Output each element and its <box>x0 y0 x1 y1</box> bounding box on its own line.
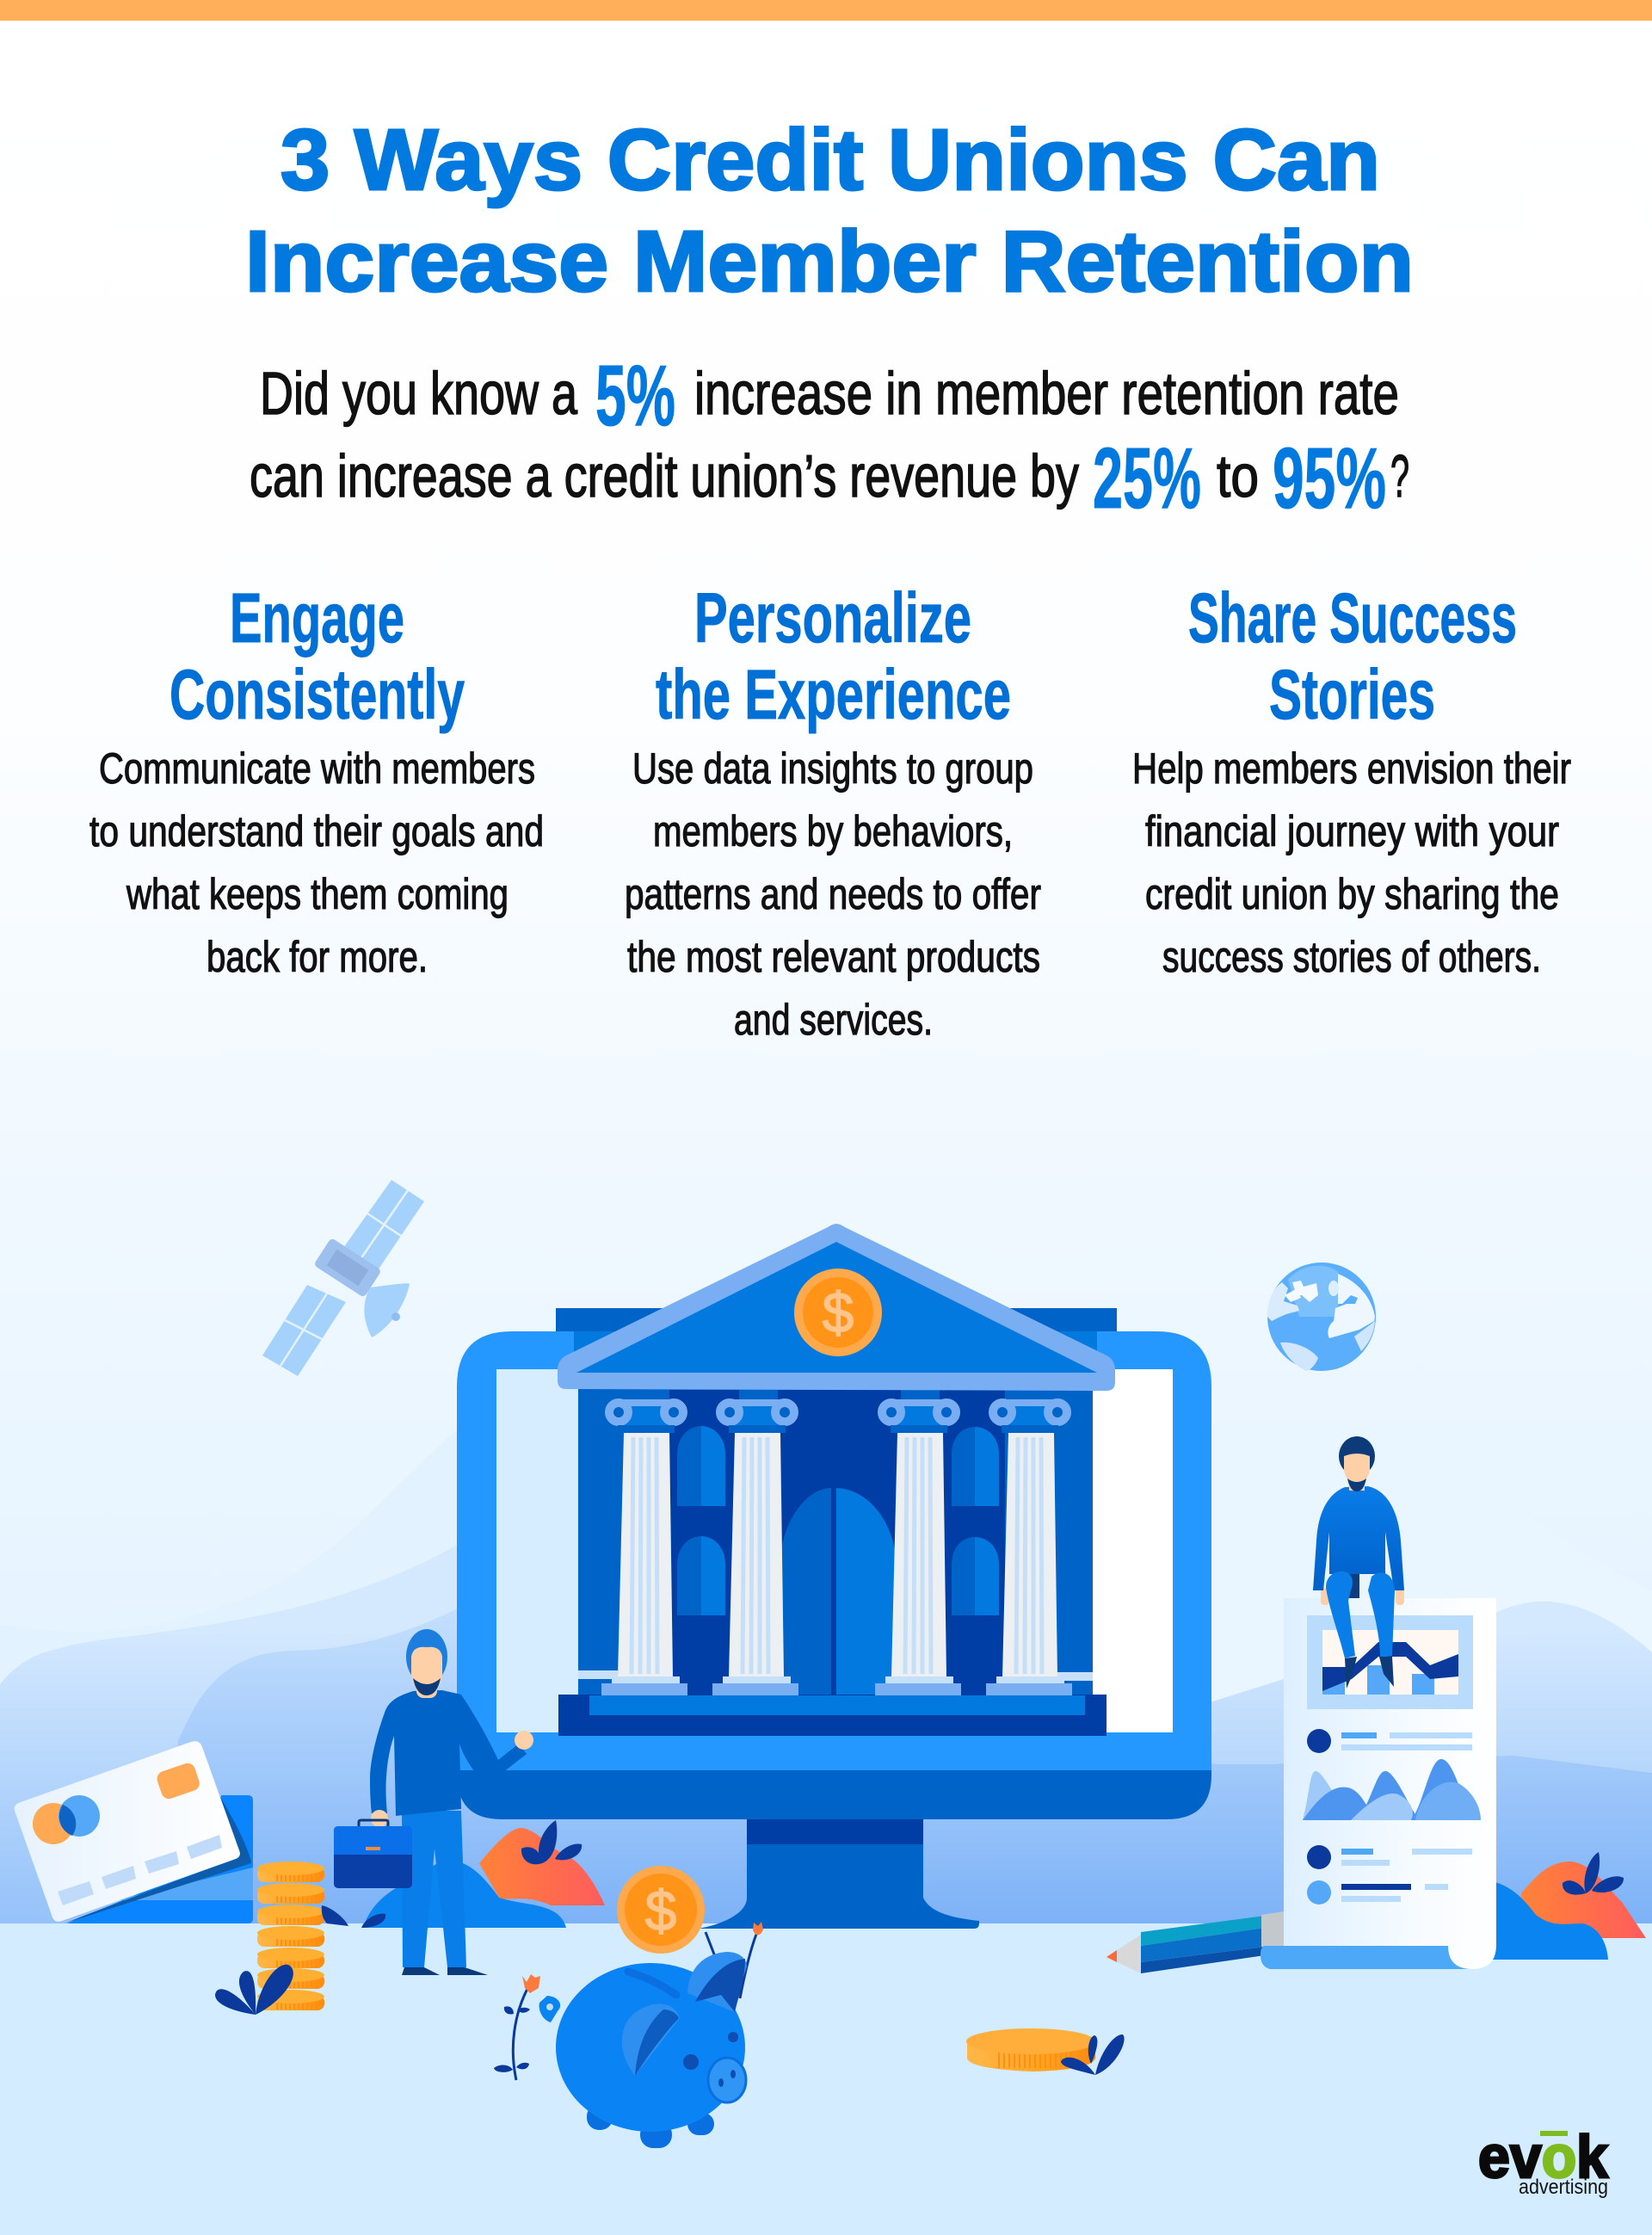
icon: flower left of pig <box>494 1974 540 2080</box>
area chart <box>1303 1759 1481 1820</box>
panel: personalize the experience <box>625 579 1041 1044</box>
panel: engage consistently: Engage <box>230 579 404 658</box>
panel: personalize the experience: Use data insights to group <box>632 744 1033 793</box>
illustration: report paper <box>1261 1598 1496 1969</box>
coin above pig: $ <box>645 1879 676 1942</box>
intro statistic sentence: 25% <box>1093 430 1201 527</box>
top orange bar <box>0 0 1652 21</box>
panel: engage consistently: Communicate with members <box>99 744 535 793</box>
illustration: seated man <box>1313 1436 1404 1689</box>
intro statistic sentence: 5% <box>595 348 675 444</box>
panel: engage consistently <box>89 579 544 981</box>
flower stem right <box>706 1932 757 1998</box>
icon: leaves by coin stack <box>215 1965 293 2015</box>
panel: share success stories: financial journey with your <box>1145 807 1559 855</box>
logo: evok advertising: evok <box>1478 2123 1608 2190</box>
panel: personalize the experience: Personalize <box>694 579 971 658</box>
panel: personalize the experience: the Experience <box>656 656 1011 734</box>
icon: coin stack <box>257 1861 324 2010</box>
illustration: piggy bank <box>539 1866 763 2148</box>
icon: credit card <box>15 1741 253 1923</box>
intro statistic sentence: ? <box>1390 442 1409 509</box>
icon: mound and orange plant left <box>363 1820 605 1928</box>
intro statistic sentence: to <box>1217 442 1259 509</box>
door <box>781 1488 895 1695</box>
logo: evok advertising: advertising <box>1519 2176 1608 2199</box>
panel: share success stories: credit union by sharing the <box>1145 870 1559 918</box>
panel: share success stories <box>1132 579 1571 981</box>
panel: share success stories: Stories <box>1269 656 1435 734</box>
column 3 <box>875 1390 961 1695</box>
illustration: man with briefcase <box>334 1629 533 1975</box>
illustration: bank building <box>556 1224 1117 1736</box>
panel: engage consistently: back for more. <box>206 933 428 981</box>
panel: share success stories: success stories of others. <box>1162 933 1541 981</box>
title: 3 Ways Credit Unions Can <box>280 112 1380 208</box>
coin on pediment: $ <box>823 1281 854 1344</box>
coin on pediment <box>794 1269 882 1356</box>
intro statistic sentence: increase in member retention rate <box>694 360 1399 427</box>
column 2 <box>712 1390 798 1695</box>
icon: satellite <box>262 1180 424 1376</box>
background hills <box>0 1411 1652 1928</box>
icon: mound and orange plant right <box>1480 1852 1646 1960</box>
list row 3 <box>1307 1880 1448 1905</box>
chart panel <box>1307 1615 1473 1709</box>
title: Increase Member Retention <box>245 213 1414 310</box>
column 1 <box>601 1390 687 1695</box>
title <box>245 112 1414 310</box>
panel: personalize the experience: and services. <box>734 996 933 1044</box>
list row 1 <box>1307 1729 1472 1753</box>
panel: engage consistently: Consistently <box>170 656 465 734</box>
base steps <box>558 1670 1106 1736</box>
icon: small leaves behind man <box>322 1905 385 1928</box>
icon: pencil <box>1106 1911 1284 1973</box>
monitor <box>457 1331 1211 1819</box>
icon: flat gold coin <box>966 2028 1095 2071</box>
windows <box>677 1426 999 1615</box>
intro statistic sentence: Did you know a <box>260 360 577 427</box>
pediment <box>558 1224 1115 1391</box>
panel: personalize the experience: the most relevant products <box>627 933 1040 981</box>
coin above pig <box>617 1866 705 1954</box>
intro statistic sentence <box>250 348 1409 527</box>
panel: personalize the experience: patterns and needs to offer <box>625 870 1041 918</box>
icon: globe <box>1267 1263 1376 1371</box>
column 4 <box>986 1390 1072 1695</box>
list row 2 <box>1307 1845 1472 1869</box>
intro statistic sentence: 95% <box>1273 430 1386 527</box>
floor <box>0 1923 1652 2235</box>
intro statistic sentence: can increase a credit union’s revenue by <box>250 442 1079 509</box>
icon: leaves by flat coin <box>1061 2034 1125 2075</box>
panel: engage consistently: to understand their goals and <box>89 807 544 855</box>
panel: personalize the experience: members by behaviors, <box>653 807 1013 855</box>
monitor stand <box>699 1816 979 1929</box>
panel: engage consistently: what keeps them coming <box>126 870 509 918</box>
